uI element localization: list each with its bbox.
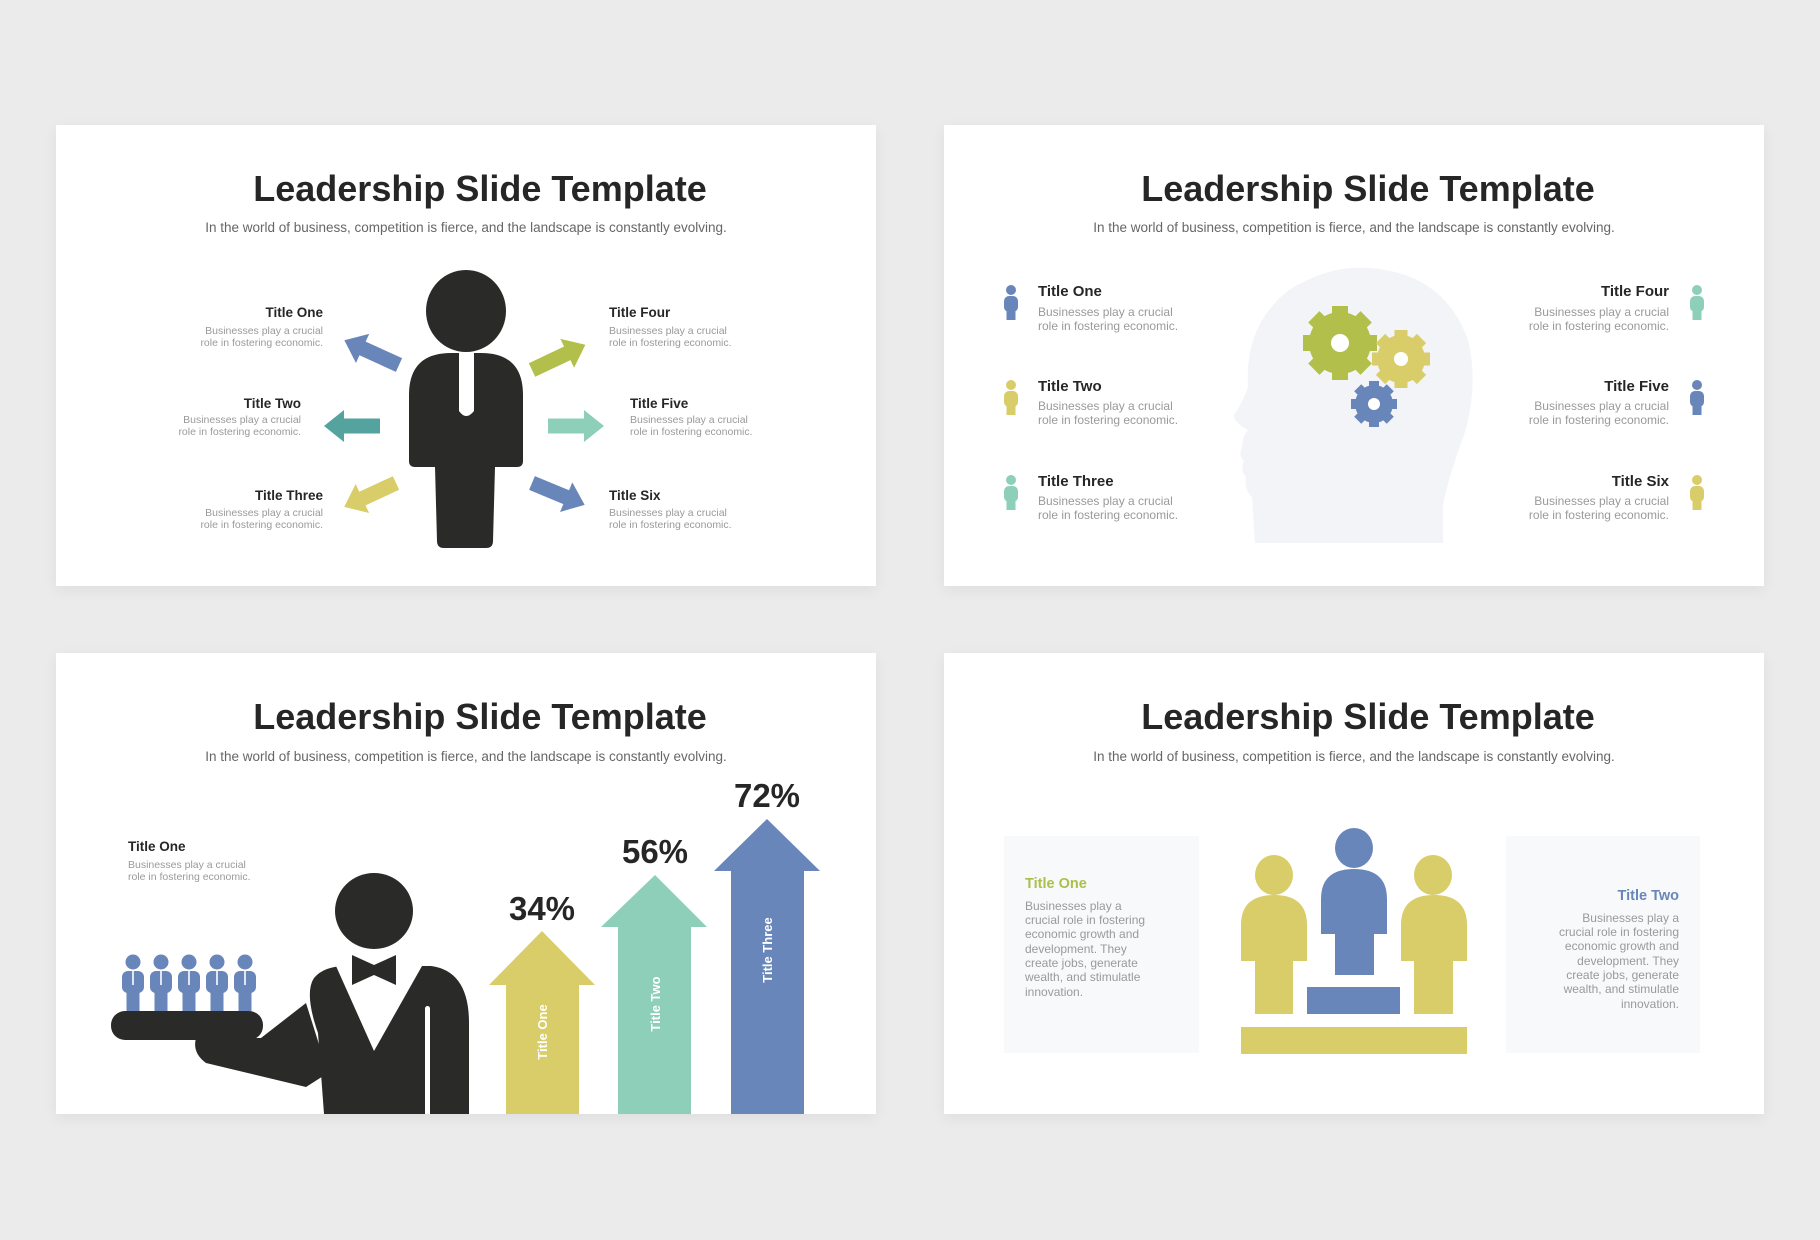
text: Title Four: Title Four <box>1601 283 1669 300</box>
text: Title One <box>200 305 323 349</box>
arrow: yellow 34%: 34% <box>509 890 575 927</box>
arrow: blue lower-right <box>526 468 591 520</box>
icon: team on tray <box>122 954 256 1011</box>
icon: head silhouette <box>1234 268 1473 543</box>
text: Title Two: Title Two <box>244 396 301 411</box>
arrow: mint 56% <box>601 833 707 1114</box>
text: Title Four: Businesses play a crucial <box>609 325 727 337</box>
text box: Title One: Businesses play a <box>1025 899 1122 913</box>
icon: blue gear <box>1351 381 1397 427</box>
panel: head with gears <box>944 125 1764 586</box>
text: Title Five: Title Five <box>1604 378 1669 395</box>
arrow: mint 56%: 56% <box>622 833 688 870</box>
text: Title One: Businesses play a crucial <box>205 325 323 337</box>
text: Title Five <box>1529 378 1669 427</box>
title: Leadership Slide Template <box>253 168 707 209</box>
arrow: mint 56%: Title Two <box>648 976 663 1032</box>
text box: Title One: development. They <box>1025 942 1127 956</box>
text: Title Two: Businesses play a crucial <box>183 414 301 426</box>
text box: Title One: create jobs, generate <box>1025 956 1138 970</box>
icon: yellow gear <box>1372 330 1430 388</box>
text box: Title Two: wealth, and stimulatle <box>1563 982 1679 996</box>
text: Title Six: role in fostering economic. <box>609 519 732 531</box>
title: Leadership Slide Template <box>1141 168 1595 209</box>
text: Title Four <box>1529 283 1669 333</box>
text box: Title Two: economic growth and <box>1565 939 1679 953</box>
text box: Title Two: create jobs, generate <box>1566 968 1679 982</box>
text box: Title One: Title One <box>1025 876 1087 892</box>
text: Title Three: role in fostering economic. <box>1038 508 1178 522</box>
icon: person yellow (row 3 right) <box>1690 475 1704 510</box>
text: Title Three: Title Three <box>1038 473 1114 490</box>
icon: waiter figure <box>111 873 469 1126</box>
title: Leadership Slide Template <box>253 696 707 737</box>
text: Title One: role in fostering economic. <box>128 871 251 883</box>
text: Title Four: role in fostering economic. <box>1529 319 1669 333</box>
icon: leader figure <box>409 270 523 548</box>
arrow: mint right <box>548 410 604 442</box>
text: Title Five: Businesses play a crucial <box>630 414 748 426</box>
icon: person yellow (row 2 left) <box>1004 380 1018 415</box>
arrow: green upper-right <box>525 330 592 384</box>
text: Title One: Title One <box>1038 283 1102 300</box>
text box: Title Two: innovation. <box>1621 997 1679 1011</box>
text: Title Two: role in fostering economic. <box>1038 413 1178 427</box>
arrow: teal left <box>324 410 380 442</box>
text: Title Three: Businesses play a crucial <box>205 507 323 519</box>
arrow: yellow lower-left <box>338 468 403 521</box>
text box: Title Two: development. They <box>1577 954 1679 968</box>
icon: team podium <box>1241 828 1467 1054</box>
arrow: yellow 34%: Title One <box>535 1004 550 1060</box>
text: Title One: Businesses play a crucial <box>128 859 246 871</box>
text: Title Five: Businesses play a crucial <box>1534 399 1669 413</box>
text: Title One: Title One <box>265 305 323 320</box>
icon: person mint (row 1 right) <box>1690 285 1704 320</box>
text box: Title One: innovation. <box>1025 985 1083 999</box>
text box: Title One: crucial role in fostering <box>1025 913 1145 927</box>
text: Title Two: role in fostering economic. <box>178 426 301 438</box>
text: Title Two <box>1038 378 1178 427</box>
text: Title Two <box>178 396 301 438</box>
text: Title One: role in fostering economic. <box>1038 319 1178 333</box>
text: Title Five <box>630 396 753 438</box>
icon: green gear <box>1303 306 1377 380</box>
text box: Title Two: Businesses play a <box>1582 911 1679 925</box>
text: Title Six: Businesses play a crucial <box>1534 494 1669 508</box>
panel: leader with arrows <box>56 125 876 586</box>
title: Leadership Slide Template <box>1141 696 1595 737</box>
text: Title Four: Businesses play a crucial <box>1534 305 1669 319</box>
arrow: yellow 34% <box>489 890 595 1114</box>
text box: Title Two: Title Two <box>1618 888 1679 904</box>
text: Title Three: Businesses play a crucial <box>1038 494 1173 508</box>
text: Title Three <box>1038 473 1178 522</box>
arrow: blue 72% <box>714 777 820 1114</box>
text: Title Three <box>200 488 323 531</box>
text: Title Three: role in fostering economic. <box>200 519 323 531</box>
text: Title Five: role in fostering economic. <box>630 426 753 438</box>
text: Title Two: Businesses play a crucial <box>1038 399 1173 413</box>
text box: Title Two: crucial role in fostering <box>1559 925 1679 939</box>
text box: Title One <box>1004 836 1199 1053</box>
text: Title Six: Businesses play a crucial <box>609 507 727 519</box>
arrow: blue 72%: 72% <box>734 777 800 814</box>
subtitle: In the world of business, competition is fierce, and the landscape is constantly evolving. <box>1093 749 1615 764</box>
text: Title One <box>1038 283 1178 333</box>
text: Title One: role in fostering economic. <box>200 337 323 349</box>
text box: Title One: economic growth and <box>1025 927 1139 941</box>
icon: person mint (row 3 left) <box>1004 475 1018 510</box>
subtitle: In the world of business, competition is fierce, and the landscape is constantly evolving. <box>205 749 727 764</box>
arrow: blue upper-left <box>338 326 406 380</box>
text: Title Four: role in fostering economic. <box>609 337 732 349</box>
text: Title Five: Title Five <box>630 396 689 411</box>
panel: waiter with growth arrows <box>56 653 876 1114</box>
text: Title Six <box>1529 473 1670 522</box>
text: Title Four: Title Four <box>609 305 671 320</box>
text: Title Six: Title Six <box>1612 473 1670 490</box>
subtitle: In the world of business, competition is fierce, and the landscape is constantly evolving. <box>1093 220 1615 235</box>
text box: Title One: wealth, and stimulatle <box>1024 970 1141 984</box>
panel: team podium <box>944 653 1764 1114</box>
text: Title Five: role in fostering economic. <box>1529 413 1669 427</box>
subtitle: In the world of business, competition is fierce, and the landscape is constantly evolving. <box>205 220 727 235</box>
text: Title Six: role in fostering economic. <box>1529 508 1669 522</box>
icon: person blue (row 2 right) <box>1690 380 1704 415</box>
text: Title Two: Title Two <box>1038 378 1102 395</box>
text: Title Six <box>609 488 732 531</box>
arrow: blue 72%: Title Three <box>760 917 775 983</box>
text box: Title Two <box>1506 836 1700 1053</box>
icon: person blue (row 1 left) <box>1004 285 1018 320</box>
text: Title Six: Title Six <box>609 488 661 503</box>
text: Title Three: Title Three <box>255 488 323 503</box>
text: Title One <box>128 839 251 883</box>
text: Title One: Businesses play a crucial <box>1038 305 1173 319</box>
text: Title One: Title One <box>128 839 186 854</box>
text: Title Four <box>609 305 732 349</box>
